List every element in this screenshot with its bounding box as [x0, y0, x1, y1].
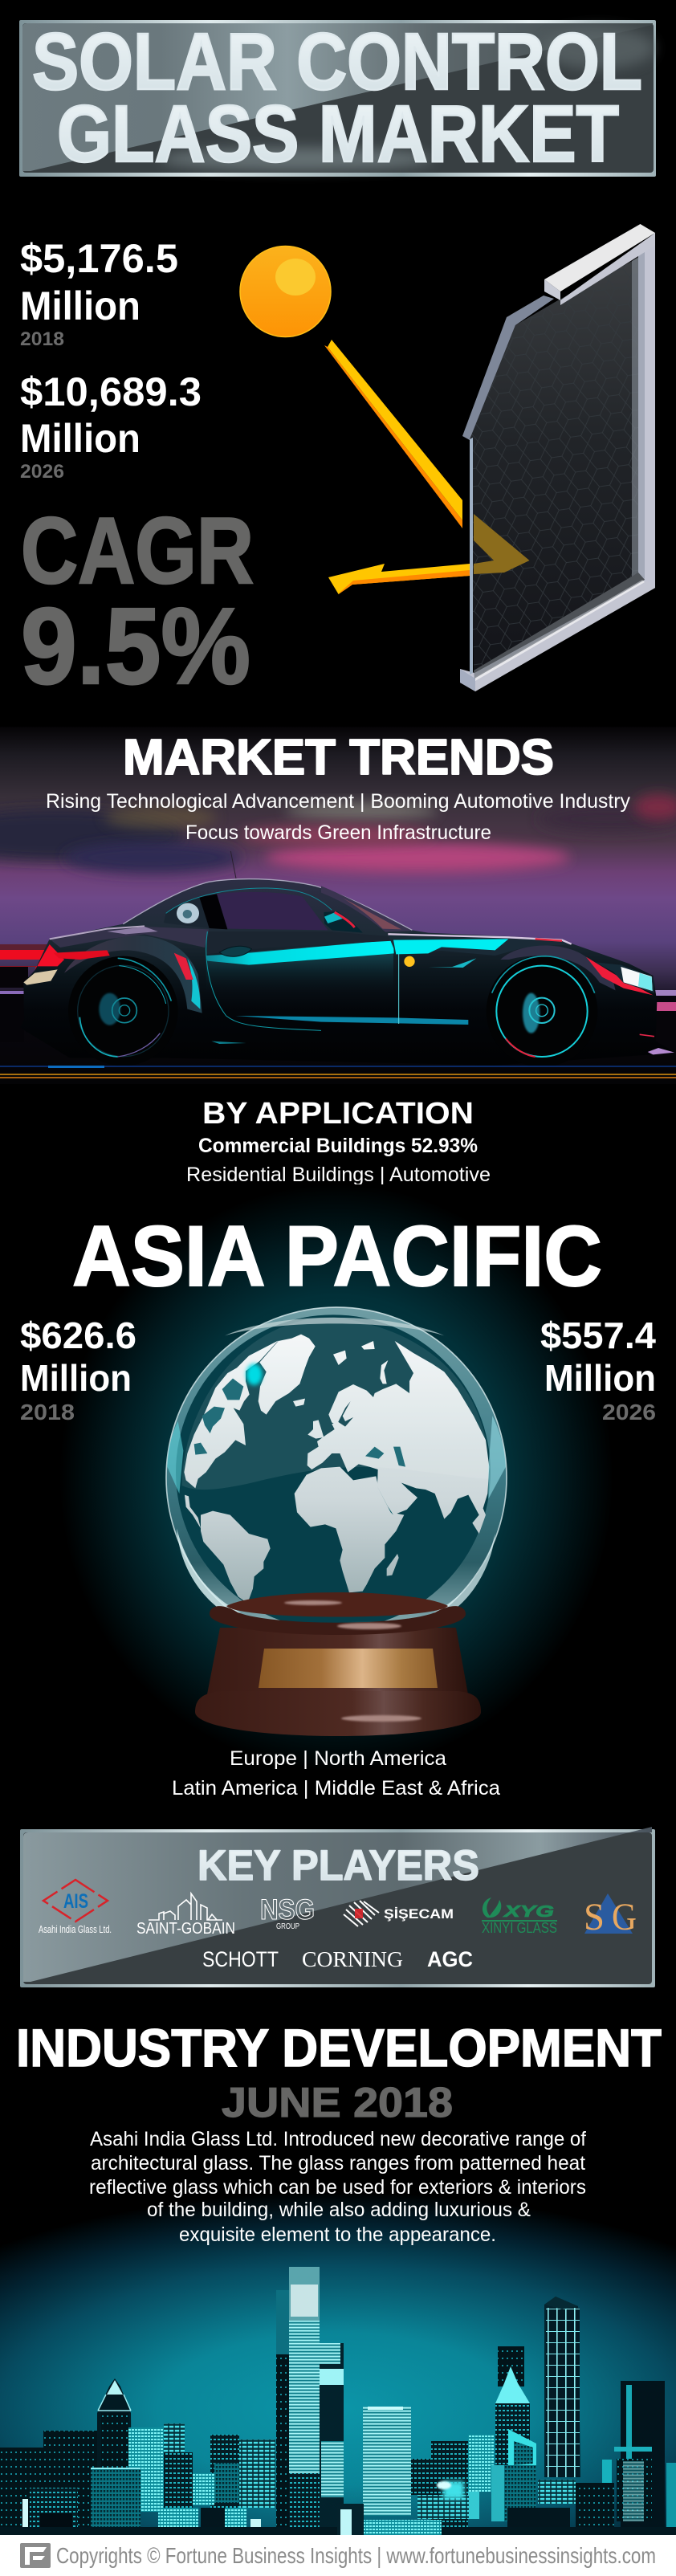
icon: glass globe	[166, 1307, 507, 1648]
market value 2018	[20, 236, 178, 350]
inland seas	[194, 1379, 405, 1515]
logo: AGC: AGC	[427, 1947, 473, 1971]
market value 2026: $10,689.3	[20, 369, 202, 414]
stat: asia pacific 2018: 2018	[20, 1400, 75, 1425]
door reflections	[206, 940, 393, 993]
front fender	[500, 946, 616, 990]
map land	[184, 1335, 489, 1604]
logo: Xinyi Glass: XYG	[503, 1903, 554, 1921]
rear fender	[64, 935, 202, 1013]
market value 2026	[20, 369, 202, 483]
panel: key players	[20, 1827, 655, 1987]
icon: glass window	[460, 224, 655, 691]
arrow: ray inside glass	[474, 514, 530, 574]
red light trail	[0, 944, 104, 988]
tower: right lower	[417, 2447, 652, 2535]
logo: SG: G	[612, 1896, 637, 1938]
road lights	[0, 1066, 676, 1078]
brass plate	[259, 1649, 438, 1688]
panel: city skyline	[0, 2192, 676, 2535]
logo: AIS	[39, 1880, 112, 1935]
trend list	[46, 790, 630, 844]
footer	[0, 2535, 676, 2576]
heading: market trends: MARKET TRENDS	[123, 730, 554, 785]
stat: asia pacific 2018	[20, 1314, 136, 1425]
logo: AIS: Asahi India Glass Ltd.	[39, 1923, 112, 1935]
section: by application	[186, 1097, 491, 1186]
panel: market trends	[0, 727, 676, 1084]
section: by application: Residential Buildings | Automotive	[186, 1164, 491, 1186]
logo: Corning: CORNING	[302, 1947, 403, 1971]
tower: left cluster	[22, 2423, 275, 2535]
stat: asia pacific 2026: $557.4	[540, 1314, 656, 1356]
logo: Xinyi Glass	[482, 1897, 557, 1936]
market value 2026: Million	[20, 416, 140, 461]
stat: asia pacific 2026	[540, 1314, 656, 1425]
other regions list	[172, 1747, 500, 1800]
head light	[586, 957, 674, 1054]
car window	[217, 892, 328, 930]
market value 2026: 2026	[20, 461, 64, 483]
city lower row	[0, 2481, 676, 2535]
section: by application: BY APPLICATION	[202, 1097, 474, 1131]
icon: sports car	[20, 851, 674, 1067]
guard rail	[0, 990, 676, 1051]
distant buildings	[0, 2381, 676, 2535]
glass reflection	[182, 1317, 489, 1490]
text block: industry development	[89, 2128, 586, 2246]
arrow: reflected ray	[328, 564, 470, 594]
market value 2018: $5,176.5	[20, 236, 178, 281]
section: by application: Commercial Buildings 52.93%	[198, 1135, 478, 1157]
text block: industry development: reflective glass which can be used for exteriors & interiors	[89, 2176, 586, 2199]
tower: central	[276, 2267, 320, 2535]
stat: asia pacific 2018: Million	[20, 1357, 132, 1399]
trend list: Focus towards Green Infrastructure	[185, 821, 491, 844]
tower: right tall	[544, 2297, 580, 2477]
text block: industry development: Asahi India Glass Ltd. Introduced new decorative range of	[90, 2128, 586, 2150]
other regions list: Latin America | Middle East & Africa	[172, 1777, 500, 1800]
icon: wooden globe base	[195, 1592, 481, 1736]
logo: Sisecam	[344, 1901, 454, 1926]
tower: left pagoda	[97, 2378, 132, 2489]
logo: Sisecam: ŞİŞECAM	[384, 1906, 454, 1922]
hood	[388, 935, 572, 956]
stat: asia pacific 2018: $626.6	[20, 1314, 136, 1356]
trend list: Rising Technological Advancement | Booming Automotive Industry	[46, 790, 630, 813]
CAGR figure: CAGR	[21, 498, 254, 603]
heading: asia pacific: ASIA PACIFIC	[72, 1208, 602, 1304]
tail light	[35, 944, 64, 970]
text block: industry development: exquisite element to the appearance.	[179, 2223, 496, 2246]
logo: Saint-Gobain	[136, 1893, 235, 1938]
logo: Xinyi Glass: XINYI GLASS	[482, 1920, 557, 1936]
text block: industry development: of the building, while also adding luxurious &	[147, 2199, 531, 2221]
market value 2018: 2018	[20, 328, 64, 350]
logo: Schott: SCHOTT	[202, 1947, 279, 1971]
tower: mid right	[491, 2346, 536, 2521]
heading: key players: KEY PLAYERS	[198, 1842, 479, 1889]
logo: SG	[584, 1893, 637, 1938]
panel: title glass	[19, 17, 656, 179]
logo: NSG: NSG	[260, 1894, 315, 1926]
title	[32, 17, 642, 179]
tower: center right	[363, 2407, 411, 2516]
rear wheel	[68, 956, 178, 1066]
stat: asia pacific 2026: Million	[544, 1357, 656, 1399]
icon: sun	[240, 246, 331, 337]
logo: NSG: GROUP	[276, 1922, 299, 1931]
date: JUNE 2018	[222, 2080, 453, 2126]
arrow: incoming sun ray	[324, 340, 462, 528]
front wheel	[487, 956, 597, 1067]
background glow: globe	[0, 1184, 676, 1771]
CAGR figure	[21, 498, 254, 707]
logo: Saint-Gobain: SAINT-GOBAIN	[136, 1920, 235, 1938]
logo: AIS: AIS	[63, 1890, 88, 1913]
tower: second central	[320, 2343, 344, 2535]
rear deck	[50, 927, 209, 948]
market value 2018: Million	[20, 283, 140, 328]
text block: industry development: architectural glass. The glass ranges from patterned heat	[91, 2152, 585, 2175]
other regions list: Europe | North America	[230, 1747, 446, 1770]
icon: Fortune Business Insights logo	[20, 2543, 51, 2568]
stat: asia pacific 2026: 2026	[602, 1400, 656, 1425]
logo: SG: S	[584, 1896, 605, 1938]
CAGR figure: 9.5%	[21, 585, 250, 707]
